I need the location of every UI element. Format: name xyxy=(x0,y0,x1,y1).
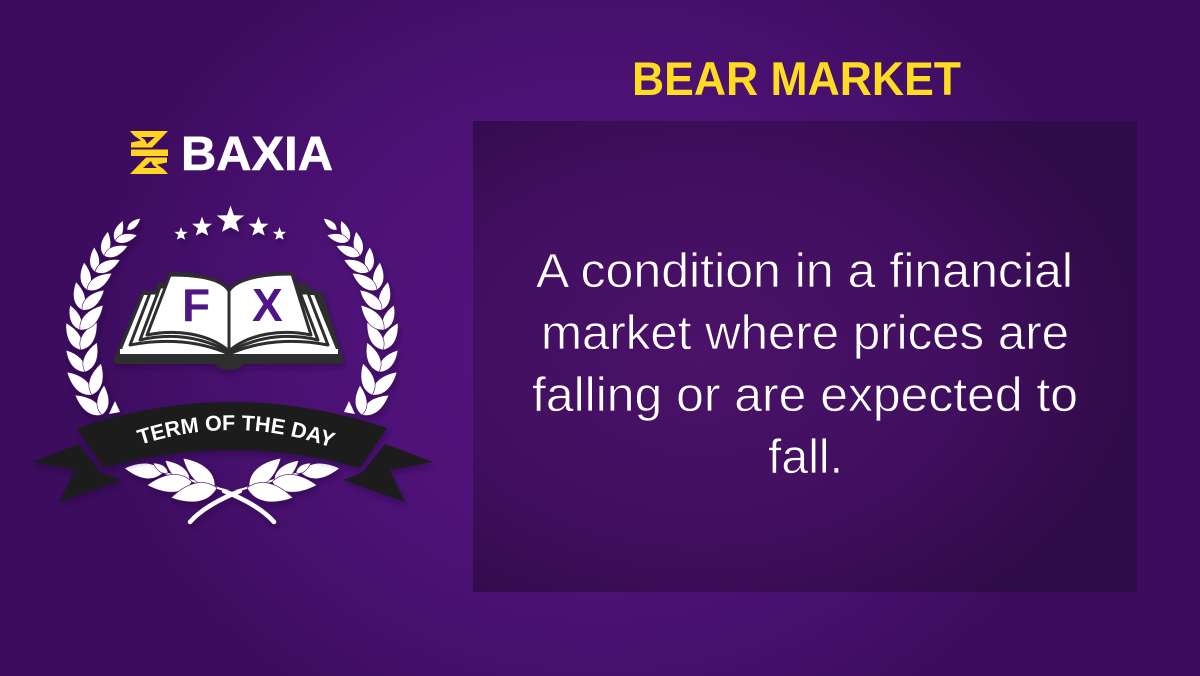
definition text xyxy=(532,245,1078,484)
ribbon tails xyxy=(32,444,433,502)
ribbon text: TERM OF THE DAY xyxy=(136,415,336,446)
definition text: falling or are expected to xyxy=(532,369,1078,422)
title: BEAR MARKET: BEAR MARKET xyxy=(632,52,961,105)
book letter F: F xyxy=(182,279,210,331)
panel: definition xyxy=(473,121,1137,592)
icon: bottom sprigs xyxy=(123,452,341,522)
definition text: fall. xyxy=(768,431,843,484)
definition text: market where prices are xyxy=(541,307,1069,360)
badge: term of the day xyxy=(32,206,433,528)
logo: BAXIA xyxy=(130,128,333,181)
icon: left laurel xyxy=(61,216,143,420)
logo wordmark: BAXIA xyxy=(181,128,333,181)
icon: open book xyxy=(114,272,343,370)
ribbon band xyxy=(77,402,387,468)
definition text: A condition in a financial xyxy=(536,245,1073,298)
icon: right laurel xyxy=(321,216,403,420)
icon: stars xyxy=(174,206,286,240)
book letter X: X xyxy=(252,279,283,331)
icon: logo mark xyxy=(130,131,168,174)
